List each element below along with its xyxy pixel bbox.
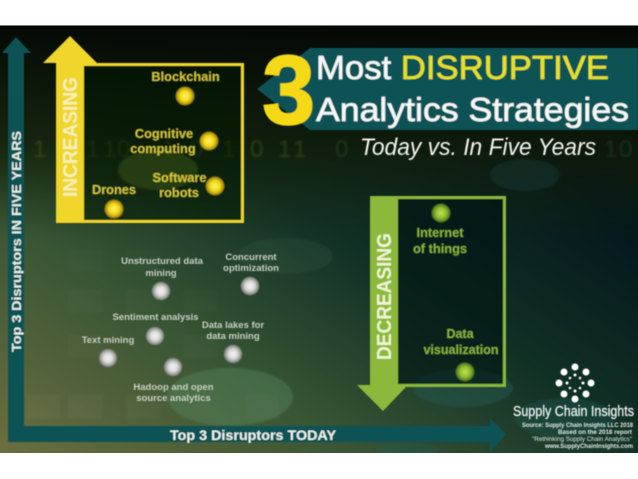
source note: "Rethinking Supply Chain Analytics" <box>532 437 632 443</box>
panel: stable disruptors <box>82 252 279 404</box>
panel: increasing <box>43 36 244 223</box>
item: concurrent optimization: Concurrent <box>225 252 277 263</box>
item: hadoop and open source analytics: source analytics <box>136 393 211 404</box>
title line 1: Most DISRUPTIVE <box>316 49 609 86</box>
horizontal axis label: Top 3 Disruptors TODAY <box>170 427 337 443</box>
item: sentiment analysis <box>112 312 199 346</box>
icon: supply chain insights logo <box>556 364 594 402</box>
yellow arrow and frame <box>43 36 244 223</box>
background panel: 0 <box>335 136 348 163</box>
item: data lakes for data mining: Data lakes for <box>202 320 264 331</box>
item: hadoop and open source analytics: Hadoop and open <box>133 382 214 393</box>
source note <box>522 423 634 450</box>
background panel: 1 <box>103 136 116 163</box>
big numeral 3: 3 <box>262 35 315 145</box>
axis arrow: top 3 disruptors in five years (vertical) and today (horizontal) <box>2 37 506 452</box>
item: drones <box>92 182 136 218</box>
item: software robots <box>152 170 224 200</box>
item: text mining <box>82 335 134 368</box>
background panel: 0 <box>190 136 203 163</box>
increasing label: INCREASING <box>60 77 82 197</box>
item: blockchain <box>151 69 220 106</box>
item: hadoop and open source analytics <box>133 358 214 404</box>
item: data lakes for data mining: data mining <box>206 331 260 342</box>
title line 2: Analytics Strategies <box>316 91 629 128</box>
background panel: 0 <box>619 136 632 163</box>
item: internet of things: of things <box>413 241 467 256</box>
panel: decreasing <box>357 196 506 411</box>
item: cognitive computing: Cognitive <box>135 126 193 141</box>
source note: Source: Supply Chain Insights LLC 2018 <box>522 423 634 429</box>
item: data visualization <box>423 327 499 382</box>
item: data lakes for data mining <box>202 320 264 364</box>
background panel: 1 <box>604 136 617 163</box>
item: data visualization: Data <box>446 327 475 341</box>
source note: www.SupplyChainInsights.com <box>544 444 633 450</box>
item: cognitive computing <box>130 126 218 156</box>
item: unstructured data mining: mining <box>145 268 177 279</box>
item: internet of things: Internet <box>417 225 464 240</box>
item: software robots: robots <box>159 185 199 200</box>
background panel: 1 <box>162 136 175 163</box>
item: text mining: Text mining <box>82 335 134 346</box>
title banner <box>257 35 638 145</box>
background panel: 1 <box>86 136 99 163</box>
source note: Based on the 2018 report <box>558 430 632 436</box>
item: unstructured data mining <box>121 256 204 300</box>
item: concurrent optimization <box>223 252 279 296</box>
vertical axis label: Top 3 Disruptors IN FIVE YEARS <box>10 131 24 352</box>
green arrow and frame <box>357 196 506 411</box>
item: concurrent optimization: optimization <box>223 263 279 274</box>
background panel: 1 <box>222 136 235 163</box>
item: software robots: Software <box>152 170 207 185</box>
item: sentiment analysis: Sentiment analysis <box>112 312 199 323</box>
background panel: 1 <box>278 136 291 163</box>
item: cognitive computing: computing <box>130 141 196 156</box>
decreasing label: DECREASING <box>374 233 396 360</box>
background panel: 0 <box>250 136 263 163</box>
item: drones: Drones <box>92 182 136 197</box>
background panel: 0 <box>117 136 130 163</box>
item: data visualization: visualization <box>423 343 499 357</box>
background panel: 1 <box>33 136 46 163</box>
background panel: 1 <box>293 136 306 163</box>
item: unstructured data mining: Unstructured data <box>121 256 204 267</box>
item: blockchain: Blockchain <box>151 69 220 84</box>
item: internet of things <box>413 204 467 256</box>
subtitle: Today vs. In Five Years <box>360 134 596 161</box>
